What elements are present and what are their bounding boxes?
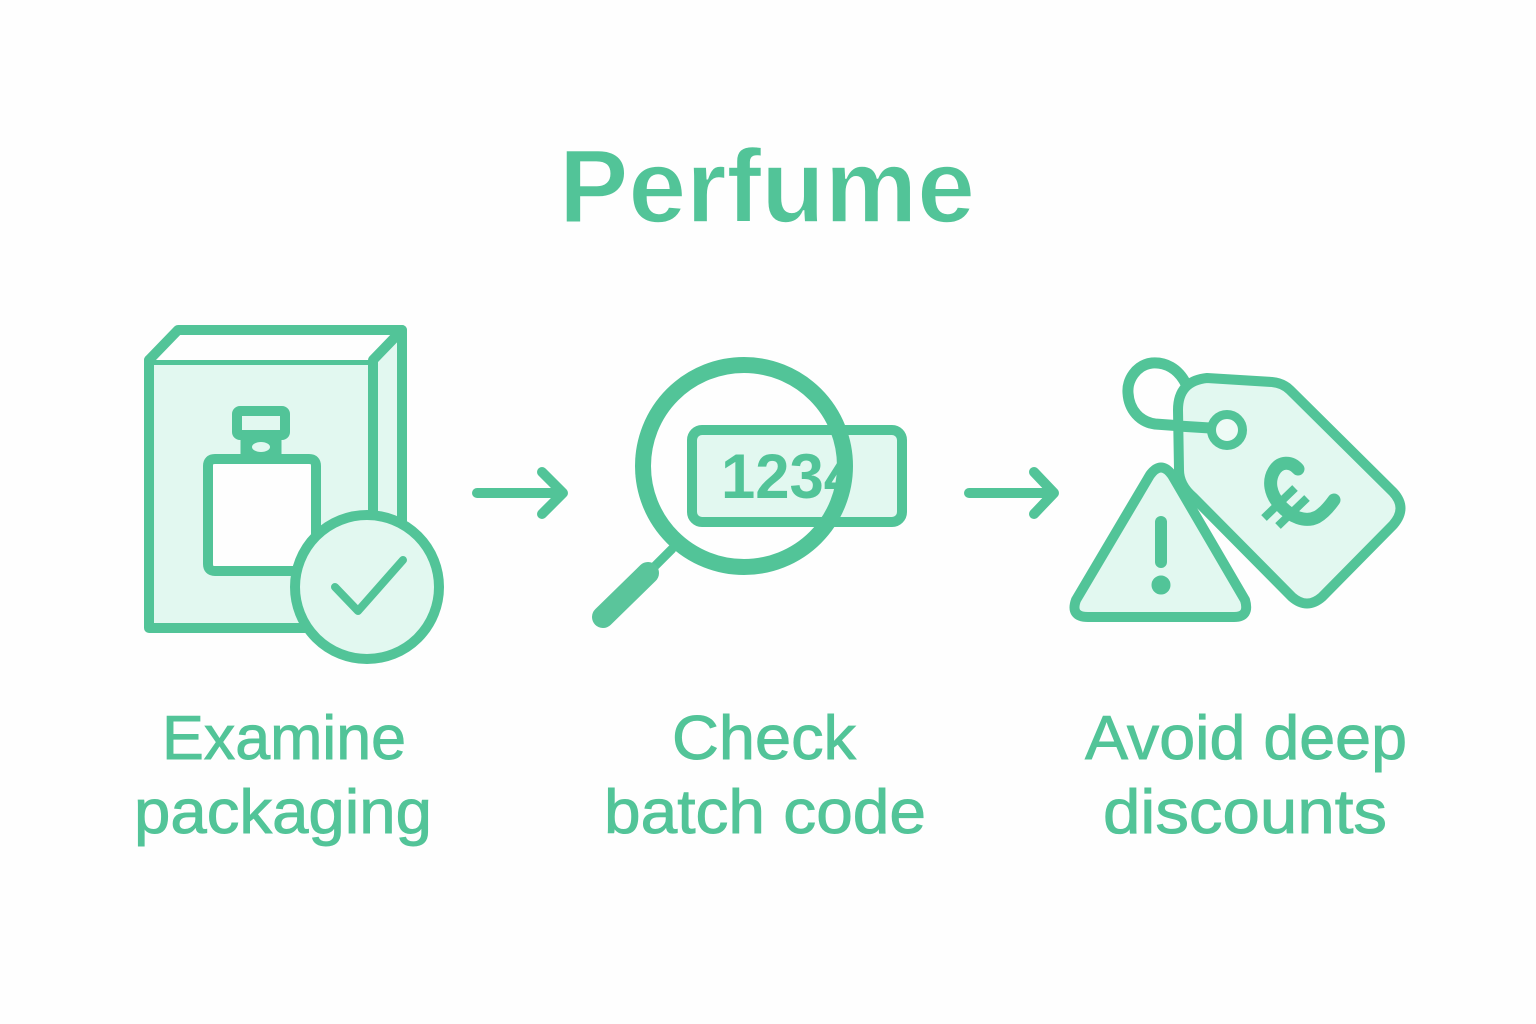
title: Perfume — [559, 129, 975, 245]
label: Check batch code — [604, 704, 926, 847]
label: Avoid deep discounts: discounts — [1103, 778, 1387, 847]
warning triangle — [1074, 468, 1246, 617]
euro symbol — [1264, 463, 1334, 526]
label: Avoid deep discounts — [1085, 704, 1407, 847]
icon: price tag with warning — [1074, 363, 1400, 617]
string loop — [1128, 363, 1210, 428]
batch number: 1234 — [721, 442, 858, 512]
label: Examine packaging: packaging — [134, 778, 432, 847]
check badge — [295, 515, 439, 659]
icon: perfume box with check — [149, 330, 439, 659]
icon: magnifier over batch code — [603, 365, 902, 617]
string front — [1178, 426, 1210, 428]
label: Check batch code: batch code — [604, 778, 926, 847]
lens — [643, 365, 845, 567]
tag hole — [1212, 414, 1242, 446]
handle — [655, 549, 672, 566]
arrow: step 1 to 2 — [477, 472, 563, 514]
label: Avoid deep discounts: Avoid deep — [1085, 704, 1407, 773]
box front — [149, 360, 373, 628]
arrow: step 2 to 3 — [969, 472, 1054, 514]
box top — [149, 330, 402, 360]
label: Examine packaging — [134, 704, 432, 847]
batch code label — [692, 430, 902, 522]
price tag — [1178, 378, 1400, 604]
box side edge — [397, 330, 407, 530]
box side panel — [373, 330, 402, 530]
label: Check batch code: Check — [672, 704, 857, 773]
perfume bottle — [208, 411, 316, 571]
exclamation mark — [1155, 522, 1167, 562]
label: Examine packaging: Examine — [162, 704, 406, 773]
